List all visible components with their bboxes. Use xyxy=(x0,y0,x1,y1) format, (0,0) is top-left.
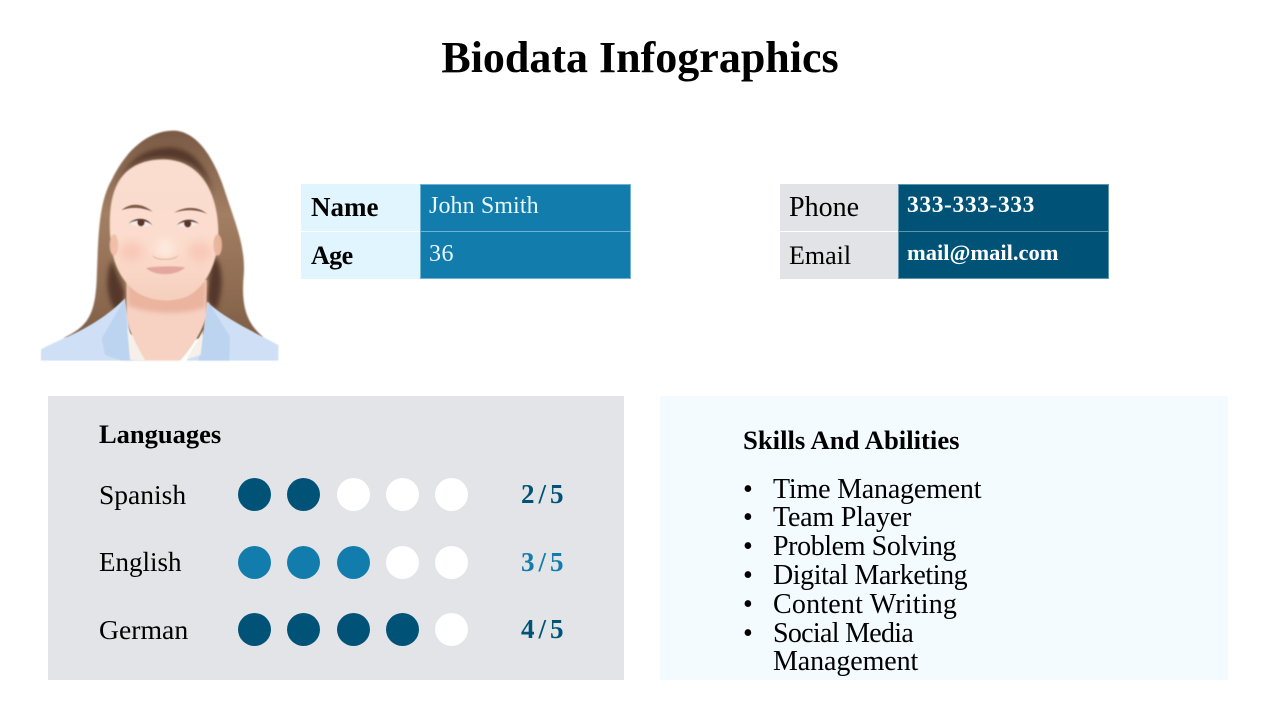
row: English: 3/5 xyxy=(521,547,568,577)
title: Biodata Infographics xyxy=(441,33,839,82)
panel: skills and abilities xyxy=(660,396,1228,680)
row: English xyxy=(99,546,568,579)
row: Spanish: Spanish xyxy=(99,479,186,510)
age label cell: Age xyxy=(311,241,353,270)
skills heading: Skills And Abilities xyxy=(743,425,960,455)
hair xyxy=(63,131,263,340)
row: German xyxy=(99,613,568,646)
skills list: • xyxy=(743,618,753,649)
skills list: • xyxy=(743,502,753,533)
email label cell xyxy=(780,232,898,279)
facial features xyxy=(122,205,207,274)
row: English: English xyxy=(99,547,182,577)
table: phone and email xyxy=(780,184,1109,279)
skills list: Problem Solving xyxy=(773,531,956,562)
neck xyxy=(127,280,207,361)
chin shadow xyxy=(127,280,207,313)
age value cell xyxy=(420,231,631,279)
skills list xyxy=(743,474,982,677)
name label cell xyxy=(301,184,420,231)
name value cell: John Smith xyxy=(429,193,539,219)
cheeks xyxy=(120,238,212,262)
row: Spanish: 2/5 xyxy=(521,479,568,509)
row: German: 4/5 xyxy=(521,614,568,644)
skills list: Team Player xyxy=(773,502,911,533)
shirt xyxy=(41,298,278,361)
age value cell: 36 xyxy=(429,241,454,267)
skills list: Management xyxy=(773,646,918,677)
phone value cell xyxy=(898,184,1109,232)
row: Spanish xyxy=(99,478,568,511)
skills list: • xyxy=(743,531,753,562)
email label cell: Email xyxy=(789,241,851,270)
hair shadow xyxy=(107,147,222,317)
skills list: Social Media xyxy=(773,618,913,649)
email value cell: mail@mail.com xyxy=(907,240,1059,265)
panel: languages xyxy=(48,396,624,680)
table: name and age xyxy=(301,184,631,279)
row: German: German xyxy=(99,614,188,645)
portrait photo xyxy=(40,130,279,362)
email value cell xyxy=(898,231,1109,279)
phone value cell: 333-333-333 xyxy=(907,192,1035,218)
name value cell xyxy=(420,184,631,232)
phone label cell: Phone xyxy=(789,192,859,223)
name label cell: Name xyxy=(311,192,378,222)
languages heading: Languages xyxy=(99,419,221,449)
skills list: • xyxy=(743,589,753,620)
age label cell xyxy=(301,232,420,279)
undershirt xyxy=(127,328,203,361)
skills list: Time Management xyxy=(773,474,981,505)
skills list: Content Writing xyxy=(773,589,957,620)
skills list: Digital Marketing xyxy=(773,560,967,591)
phone label cell xyxy=(780,184,898,231)
face xyxy=(110,159,222,300)
skills list: • xyxy=(743,560,753,591)
skills list: • xyxy=(743,474,753,505)
